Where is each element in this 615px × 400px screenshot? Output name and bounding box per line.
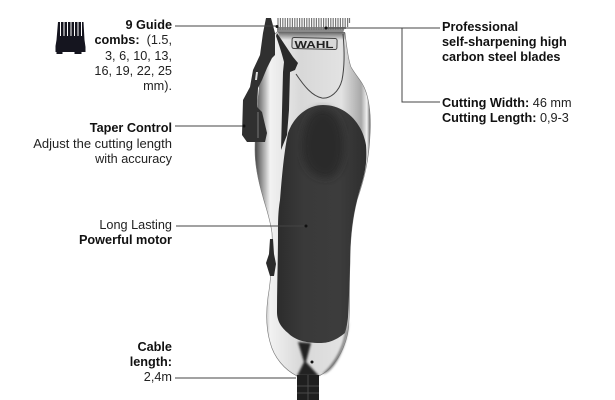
text: blades: self-sharpening high bbox=[442, 35, 567, 49]
taper lever bbox=[242, 18, 275, 142]
callout lines bbox=[175, 26, 440, 378]
text: cutting specs: Cutting Width: 46 mm bbox=[442, 96, 572, 110]
clipper bbox=[242, 18, 370, 400]
text: guide combs: 3, 6, 10, 13, bbox=[105, 48, 172, 62]
text: cable length: 2,4m bbox=[144, 370, 172, 384]
text: cable length: length: bbox=[130, 355, 172, 369]
text: guide combs: 9 Guide bbox=[125, 18, 172, 32]
text: motor bbox=[79, 218, 172, 247]
text: motor: Long Lasting bbox=[99, 218, 172, 232]
text: blades: Professional bbox=[442, 20, 518, 34]
blades bbox=[277, 18, 350, 33]
grip thumb recess bbox=[302, 109, 344, 178]
lower chrome reflection bbox=[297, 342, 319, 376]
side trim strip bbox=[276, 33, 298, 150]
text: guide combs: combs: (1.5, bbox=[94, 33, 172, 47]
callout dots bbox=[242, 25, 328, 364]
switch bbox=[266, 239, 276, 276]
silver body bbox=[255, 32, 370, 376]
cord bbox=[297, 375, 319, 400]
text: cutting specs bbox=[442, 96, 572, 125]
text: cable length bbox=[130, 340, 172, 384]
text: guide combs bbox=[94, 18, 172, 93]
text: guide combs: mm). bbox=[143, 79, 172, 93]
badge bbox=[292, 37, 337, 51]
text: taper control: Taper Control bbox=[90, 120, 172, 134]
text: taper control: with accuracy bbox=[95, 152, 172, 166]
text: blades bbox=[442, 20, 567, 64]
icon: guide comb bbox=[56, 22, 86, 54]
badge: WAHL bbox=[294, 39, 334, 51]
grip bbox=[277, 105, 366, 343]
text: blades: carbon steel blades bbox=[442, 50, 560, 64]
text: cable length: Cable bbox=[137, 340, 172, 354]
text: taper control: Adjust the cutting length bbox=[33, 136, 172, 151]
text: guide combs: 16, 19, 22, 25 bbox=[94, 64, 172, 78]
text: motor: Powerful motor bbox=[79, 233, 172, 247]
text: cutting specs: Cutting Length: 0,9-3 bbox=[442, 111, 569, 125]
text: taper control bbox=[33, 120, 172, 166]
